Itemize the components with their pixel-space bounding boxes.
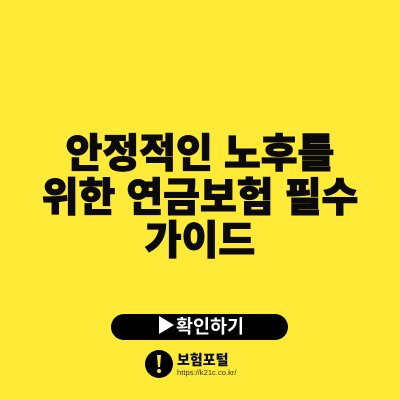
icon: play triangle: [159, 316, 174, 334]
title: 가이드: [145, 219, 255, 263]
title: 안정적인 노후를: [66, 132, 334, 176]
logo: 보험포털: [145, 350, 237, 378]
brand name: 보험포털: [177, 352, 229, 368]
button: confirm: [111, 314, 288, 340]
title: 위한 연금보험 필수: [42, 176, 358, 220]
title: [42, 132, 358, 263]
url: https://k21c.co.kr/: [177, 368, 237, 377]
button label: 확인하기: [176, 316, 244, 337]
icon: exclamation circle: [145, 350, 173, 378]
